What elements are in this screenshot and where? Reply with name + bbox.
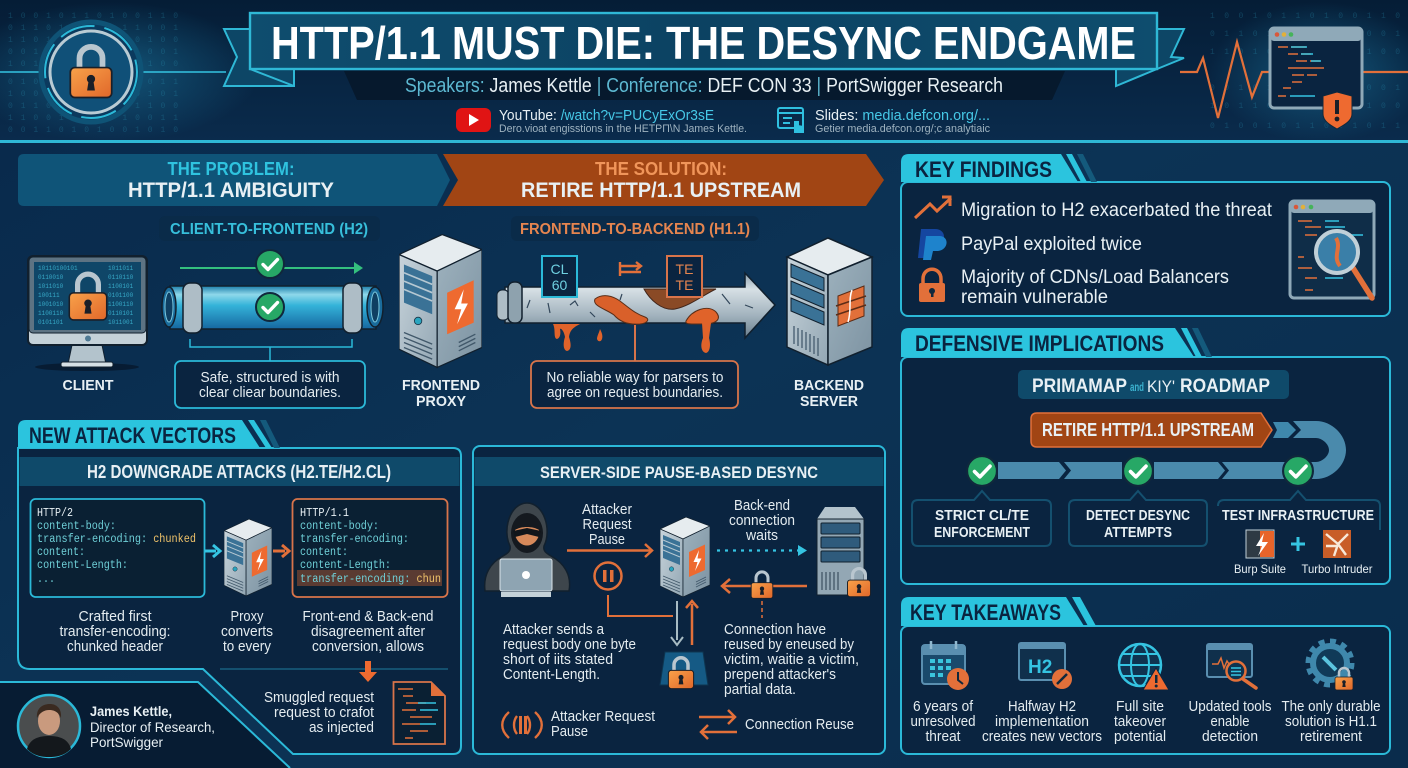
slides link [778,107,990,135]
code block: HTTP/2 [30,499,204,597]
takeaway: six years: unresolved [910,714,976,730]
icon: transfer-encoding tag: TE [676,277,693,293]
speaker card: PortSwigger [90,734,163,750]
step: detect desync: DETECT DESYNC [1086,508,1190,524]
check 3 [1283,456,1313,486]
label: frontend to backend [511,216,759,241]
text: smuggled request: as injected [309,720,374,736]
callout: unreliable parsers: agree on request boundaries. [547,385,723,401]
takeaway: updated tools: enable [1210,714,1250,730]
code block: HTTP/1.1: content: [300,546,348,559]
step: test infrastructure: Turbo Intruder [1302,562,1373,576]
arrow: proxy to lock [671,601,683,645]
icon: monitor and magnifier [1207,644,1256,688]
icon: pause symbol [594,562,622,590]
text: smuggled request [264,690,374,736]
icon: rising trend [915,197,951,218]
heading tab: NEW ATTACK VECTORS [29,423,236,448]
text: attacker sends: Content-Length. [503,667,600,683]
takeaway: site takeover [1114,644,1169,745]
banner: the problem: THE PROBLEM: [168,159,294,179]
finding: CDNs [961,267,1229,308]
caption: disagreement: Front-end & Back-end [302,609,434,625]
caption: crafted header [60,609,170,655]
text: connection reused: partial data. [724,682,796,698]
binary texture right: 1 1 0 1 0 0 1 0 1 1 0 1 0 0 [1210,48,1400,57]
corrosion patches [595,289,718,353]
text: smuggled request: Smuggled request [264,690,374,706]
icon: transfer-encoding tag: TE [676,261,693,277]
takeaway: six years: threat [926,729,960,745]
icon: calendar and clock [922,641,969,690]
finding: CDNs: remain vulnerable [961,287,1108,308]
code block: HTTP/2: transfer-encoding: chunked [37,533,196,546]
bracket and callout: safe [175,339,365,408]
icon: client monitor: 0101100 [108,292,134,299]
arrow: attacker to proxy [567,544,652,557]
legend: attacker request pause: Pause [551,724,588,740]
corrosion drips [553,324,602,351]
binary texture left: 0 1 1 0 1 0 0 1 0 1 1 0 0 1 [8,24,178,33]
youtube link: YouTube: /watch?v=PUCyExOr3sE [499,107,714,124]
icon: client monitor [28,256,147,371]
legend: connection reuse: Connection Reuse [745,717,854,733]
banner: the problem: HTTP/1.1 AMBIGUITY [128,179,334,202]
label: back-end waits: Back-end [734,498,790,514]
label: backend server [794,377,864,410]
icon: code window with alert shield [1270,28,1362,129]
icon: burp suite [1246,530,1274,558]
roadmap heading: KIY' [1147,377,1175,396]
icon: frontend server [399,235,482,367]
label: client to frontend [159,216,380,241]
code block: HTTP/1.1: HTTP/1.1 [300,507,349,520]
step: test infrastructure: Burp Suite [1234,562,1286,576]
speaker card [18,695,215,757]
legend: connection reuse [699,710,854,739]
binary texture left: 1 0 0 1 1 0 0 1 1 0 0 1 0 1 [8,90,178,99]
slides link: Getier media.defcon.org/;c analytiaic [815,123,990,135]
icon: backend server with lock [817,507,871,597]
icon: slides [778,108,803,132]
icon: transfer-encoding tag [667,256,702,297]
finding: CDNs: Majority of CDNs/Load Balancers [961,267,1229,288]
binary texture right: 0 1 1 0 1 0 0 1 0 1 1 0 0 1 [1210,30,1400,39]
caption: proxy converts: converts [221,624,273,640]
arrow: to proxy [205,545,220,557]
text: smuggled request: request to crafot [274,705,374,721]
binary texture left: 0 0 1 1 0 1 0 1 0 0 1 0 1 0 [8,126,178,135]
icon: client monitor: 0110110 [108,274,134,281]
banner: the problem [18,154,450,206]
arrow: dotted waiting connection [717,545,807,556]
icon: injected document [394,682,445,744]
callout: unreliable parsers: No reliable way for parsers to [546,370,724,386]
step: strict CL/TE: ENFORCEMENT [934,525,1030,541]
heartbeat line [1180,42,1408,118]
bracket and callout: safe: Safe, structured is with [200,370,340,386]
code block: HTTP/2: content-body: [37,520,116,533]
icon: client monitor: 0110101 [108,310,134,317]
icon: code under magnifier [1290,201,1374,298]
takeaway: halfway H2: creates new vectors [982,729,1102,745]
icon: proxy server [660,517,710,597]
icon: conflict arrows [620,262,641,276]
binary texture left: 1 0 0 1 0 1 1 0 1 0 0 1 1 0 [8,12,178,21]
finding: paypal: PayPal exploited twice [961,234,1142,255]
icon: client monitor: 1011001 [108,319,134,326]
label: client to frontend: CLIENT-TO-FRONTEND (H2) [170,221,368,238]
takeaway: durable solution: solution is H1.1 [1285,714,1377,730]
icon: client monitor: 100111 [38,292,60,299]
speaker card: Director of Research, [90,719,215,735]
text: connection reused: prepend attacker's [724,667,836,683]
takeaway: updated tools: detection [1202,729,1258,745]
binary texture right: 0 1 0 0 1 0 1 1 0 0 1 0 1 1 [1210,122,1400,131]
text: connection reused: victim, waitie a victim, [724,652,859,668]
slides link: Slides: media.defcon.org/... [815,107,990,124]
takeaway: site takeover: takeover [1114,714,1166,730]
icon: client monitor: 1100110 [108,301,134,308]
label: backend server: BACKEND [794,377,864,394]
subtitle band [344,71,1065,100]
takeaway: halfway H2: implementation [995,714,1089,730]
bracket and callout: safe: clear cliear boundaries. [199,385,341,401]
caption: crafted header: Crafted first [78,609,152,625]
takeaway: six years [910,641,976,745]
icon: H2 window: H2 [1028,657,1052,678]
binary texture right: 0 0 1 0 1 1 0 1 1 0 1 0 0 1 [1210,84,1400,93]
icon: client monitor: 1011011 [108,265,134,272]
arrow: from proxy [273,545,289,557]
title ribbon [224,13,1184,86]
step: detect desync: ATTEMPTS [1104,525,1172,541]
icon: client monitor: 0110010 [38,274,64,281]
code block: HTTP/2: content: [37,546,85,559]
takeaway: site takeover: potential [1114,729,1166,745]
heading tab: DEFENSIVE IMPLICATIONS [915,331,1164,356]
subheading: pause desync [474,457,884,486]
step: test infrastructure: TEST INFRASTRUCTURE [1222,508,1374,524]
icon: client monitor: 1001010 [38,301,64,308]
roadmap track [998,421,1346,479]
callout: unreliable parsers [531,325,738,408]
speaker card: James Kettle, [90,703,172,719]
code block: HTTP/1.1 [292,499,448,597]
icon: hooded attacker [485,503,570,597]
banner: the solution: RETIRE HTTP/1.1 UPSTREAM [521,179,801,202]
caption: proxy converts [221,609,273,655]
header band [0,0,1408,143]
code block: HTTP/1.1: transfer-encoding: chun [300,573,441,586]
text: connection reused: Connection have [724,622,826,638]
caption: proxy converts: to every [223,639,272,655]
icon: open lock [919,269,945,302]
text: connection reused: reused by eneused by [724,637,855,653]
title: HTTP/1.1 MUST DIE: THE DESYNC ENDGAME [271,17,1136,69]
label: back-end waits: waits [745,528,778,544]
arrow: lock to proxy [686,601,698,645]
code block: HTTP/2: ... [37,573,55,586]
step: retire upstream: RETIRE HTTP/1.1 UPSTREAM [1042,420,1254,440]
subheading: pause desync: SERVER-SIDE PAUSE-BASED DESYNC [540,463,818,482]
roadmap heading: ROADMAP [1180,376,1270,397]
label: attacker request pause [582,502,632,548]
icon: locked connection base [660,652,708,689]
icon: padlock emblem [41,22,141,122]
label: attacker request pause: Attacker [582,502,632,518]
binary texture left: 1 1 0 1 0 0 1 0 1 1 0 1 0 0 [8,36,178,45]
step: detect desync [1069,491,1207,546]
takeaway: durable solution: The only durable [1282,699,1380,715]
takeaway: site takeover: Full site [1116,699,1164,715]
icon: backend server [787,238,872,365]
code block: HTTP/1.1: content-body: [300,520,379,533]
panel: pause-based desync [473,446,885,754]
takeaway: durable solution: retirement [1300,729,1362,745]
panel: new attack vectors [18,420,461,754]
binary texture right: 1 0 1 1 0 1 0 0 0 1 1 1 0 0 [1210,102,1400,111]
subheading: H2 downgrade: H2 DOWNGRADE ATTACKS (H2.TE/H2.CL) [87,462,391,482]
step: strict CL/TE: STRICT CL/TE [935,508,1029,524]
subtitle band: Speakers: James Kettle | Conference: DEF CON 33 | PortSwigger Research [405,75,1003,97]
takeaway: updated tools: Updated tools [1188,699,1272,715]
step: retire upstream [1031,413,1272,447]
green arrow with check [180,250,363,278]
takeaway: six years: 6 years of [913,699,974,715]
label: attacker request pause: Request [582,517,632,533]
text: connection reused [724,622,859,698]
caption: disagreement: conversion, allows [312,639,424,655]
panel: key findings [901,154,1390,316]
speaker strip background [0,682,290,768]
roadmap heading: PRIMAMAP [1032,376,1127,397]
binary texture right: 1 0 0 1 0 1 1 0 1 0 0 1 1 0 [1210,12,1400,21]
icon: turbo intruder [1323,530,1351,558]
binary texture left: 1 0 1 1 0 1 0 0 0 1 1 1 0 0 [8,60,178,69]
label: backend server: SERVER [800,393,858,410]
youtube link [456,107,747,135]
icon: gear and lock [1308,641,1353,690]
code block: HTTP/2: content-Length: [37,559,128,572]
heading tab: KEY TAKEAWAYS [910,600,1061,625]
safe pipe [162,283,383,333]
takeaway: durable solution [1282,641,1380,745]
arrow: backend to proxy with lock [722,572,807,618]
icon: client monitor: 1100101 [108,283,134,290]
banner: the solution: THE SOLUTION: [595,159,727,179]
label: back-end waits [729,498,795,544]
label: frontend proxy: PROXY [416,393,466,410]
check 2 [1123,456,1153,486]
step: test infrastructure [1218,491,1380,576]
speaker portrait [18,695,80,757]
takeaway: halfway H2: Halfway H2 [1008,699,1076,715]
roadmap heading: and [1130,380,1144,394]
caption: crafted header: transfer-encoding: [60,624,170,640]
caption: disagreement [302,609,434,655]
icon: client monitor: 1011010 [38,283,64,290]
icon: proxy server [224,519,272,596]
icon: client monitor: 0101101 [38,319,64,326]
finding: migration: Migration to H2 exacerbated the threat [961,200,1273,221]
banner: the solution [443,154,884,206]
arrow: down to smuggled request [359,661,377,682]
text: attacker sends: short of iits stated [503,652,613,668]
icon: youtube [456,108,491,132]
label: attacker request pause: Pause [589,532,625,548]
icon: client monitor: 1100110 [38,310,64,317]
step: strict CL/TE [912,491,1051,546]
panel: defensive implications [901,328,1390,584]
icon: paypal [918,229,947,260]
label: back-end waits: connection [729,513,795,529]
icon: client monitor: 10110100101 [38,265,78,272]
text: attacker sends: Attacker sends a [503,622,605,638]
code block: HTTP/2: HTTP/2 [37,507,73,520]
roadmap heading [1018,370,1289,399]
subheading: H2 downgrade [20,457,460,486]
binary texture left: 0 0 1 0 1 1 0 1 1 0 1 0 0 1 [8,48,178,57]
text: attacker sends: request body one byte [503,637,636,653]
binary texture left: 0 1 0 0 1 0 1 1 0 0 1 0 1 1 [8,78,178,87]
code block: HTTP/1.1: transfer-encoding: [300,533,409,546]
plus [1291,537,1305,551]
label: client: CLIENT [62,377,114,394]
caption: disagreement: disagreement after [311,624,425,640]
binary texture left: 1 1 0 0 1 0 1 0 0 1 0 0 1 1 [8,114,178,123]
broken pipe arrow [497,273,775,353]
panel: key takeaways [901,597,1390,754]
binary texture right [1210,12,1400,131]
legend: attacker request pause: Attacker Request [551,709,655,725]
legend: attacker request pause [502,709,655,740]
text: attacker sends [503,622,636,683]
heading tab: KEY FINDINGS [915,157,1052,182]
label: frontend proxy: FRONTEND [402,377,480,394]
label: frontend to backend: FRONTEND-TO-BACKEND (H1.1) [520,221,750,238]
binary texture left: 0 1 1 0 0 1 1 0 1 0 1 1 0 0 [8,102,178,111]
icon: content-length tag: 60 [552,277,567,293]
caption: crafted header: chunked header [67,639,163,655]
takeaway: updated tools [1188,644,1272,745]
takeaway: halfway H2 [982,643,1102,745]
icon: content-length tag [542,256,577,297]
binary texture left [8,12,178,135]
youtube link: Dero.vioat engisstions in the HETPΠ\N James Kettle. [499,123,747,135]
check 1 [967,456,997,486]
icon: content-length tag: CL [551,261,569,277]
caption: proxy converts: Proxy [230,609,264,625]
code block: HTTP/1.1: content-Length: [300,559,391,572]
icon: globe warning [1119,644,1169,690]
label: frontend proxy [402,377,480,410]
